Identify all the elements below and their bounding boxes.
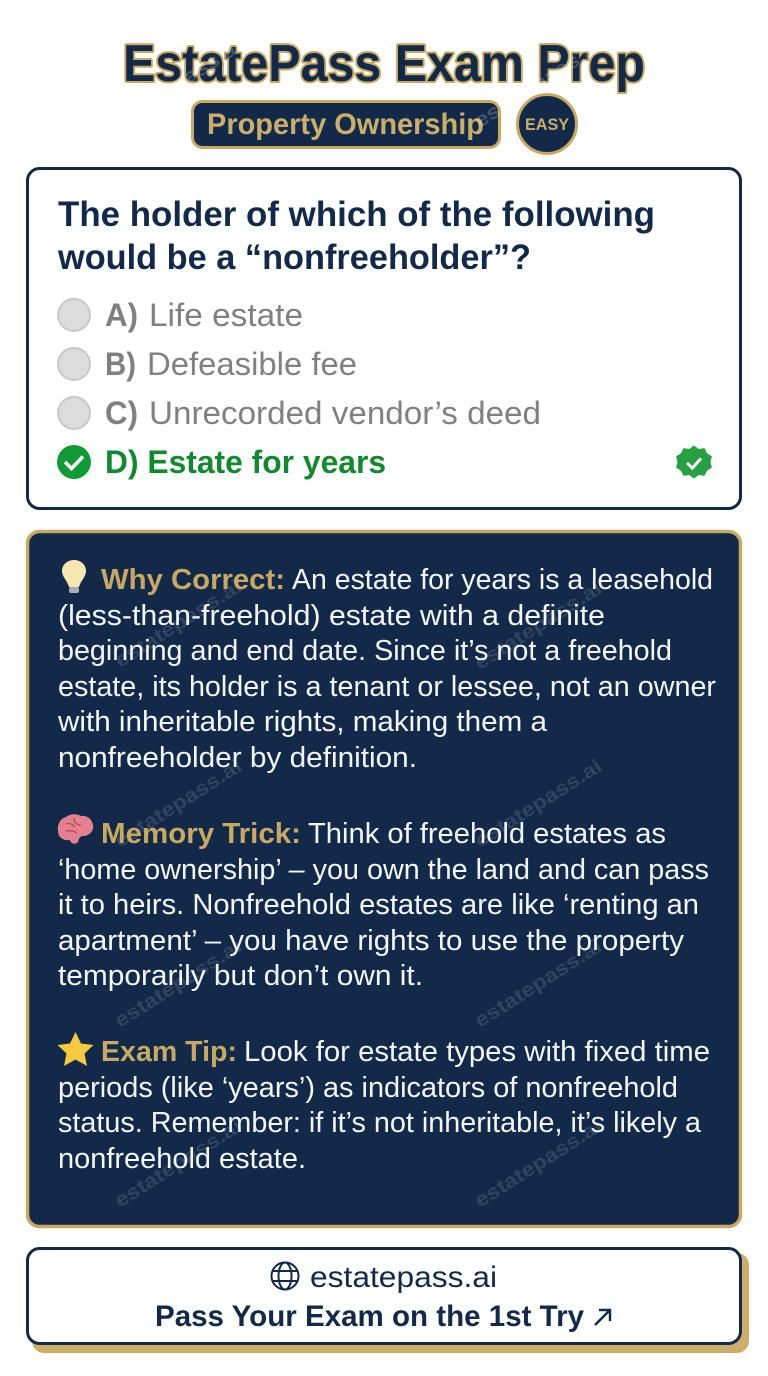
watermarks: estatepass.ai xyxy=(471,1115,606,1212)
section: why correct: nonfreeholder by definition. xyxy=(58,742,417,774)
option C: Unrecorded vendor’s deed xyxy=(149,395,541,431)
arrow xyxy=(595,1310,610,1325)
section: why correct: (less-than-freehold) estate with a definite xyxy=(58,600,605,632)
difficulty badge: EASY xyxy=(525,115,570,134)
watermarks: estatepass.ai xyxy=(111,575,246,672)
category pill: Property Ownership xyxy=(207,108,484,141)
watermarks: estatepass.ai xyxy=(111,1115,246,1212)
watermarks over header: estatepass.ai xyxy=(111,35,246,132)
section: memory trick: it to heirs. Nonfreehold estates are like ‘renting an xyxy=(58,889,699,921)
section: memory trick xyxy=(58,814,709,992)
option A: Life estate xyxy=(149,297,303,333)
panel: explanation xyxy=(28,532,740,1226)
section: why correct: with inheritable rights, making them a xyxy=(57,706,548,738)
option B: B) xyxy=(105,346,136,382)
option B: Defeasible fee xyxy=(147,346,357,382)
section: exam tip: periods (like ‘years’) as indicators of nonfreehold xyxy=(58,1072,678,1104)
icon: star xyxy=(58,1032,94,1066)
watermarks: estatepass.ai xyxy=(471,935,606,1032)
section: memory trick: temporarily but don’t own it. xyxy=(58,960,423,992)
panel: footer call to action xyxy=(28,1248,749,1353)
icon: light bulb xyxy=(62,560,86,593)
icon: brain xyxy=(58,814,93,844)
tagline: Pass Your Exam on the 1st Try xyxy=(155,1300,584,1333)
section: why correct xyxy=(57,560,716,774)
question text xyxy=(57,195,655,277)
section: exam tip: Look for estate types with fixed time xyxy=(244,1036,710,1068)
option A xyxy=(58,297,303,333)
section: why correct: Why Correct: xyxy=(101,564,285,596)
option C: C) xyxy=(105,395,138,431)
category pill xyxy=(192,102,500,148)
option D correct: D) Estate for years xyxy=(105,444,386,480)
watermarks: estatepass.ai xyxy=(111,755,246,852)
watermarks over header: estatepass.ai xyxy=(471,35,606,132)
option A: A) xyxy=(105,297,138,333)
watermarks xyxy=(111,575,606,1212)
section: memory trick: Memory Trick: xyxy=(101,818,301,850)
icon: globe xyxy=(272,1262,298,1290)
section: why correct: An estate for years is a leasehold xyxy=(292,564,713,596)
question text: The holder of which of the following xyxy=(58,195,655,234)
section: why correct: beginning and end date. Since it’s not a freehold xyxy=(58,635,672,667)
section: memory trick: ‘home ownership’ – you own the land and can pass xyxy=(58,854,709,886)
difficulty badge xyxy=(518,94,576,154)
icon: verified badge xyxy=(676,445,712,479)
section: memory trick: apartment’ – you have rights to use the property xyxy=(58,925,684,957)
section: exam tip: nonfreehold estate. xyxy=(58,1143,306,1175)
panel: question xyxy=(28,168,740,508)
watermarks over header xyxy=(111,35,606,132)
watermarks: estatepass.ai xyxy=(471,577,606,674)
section: exam tip: status. Remember: if it’s not inheritable, it’s likely a xyxy=(58,1107,702,1139)
website: estatepass.ai xyxy=(310,1261,497,1294)
option B xyxy=(58,346,357,382)
section: exam tip xyxy=(58,1032,710,1175)
title: EstatePass Exam Prep xyxy=(123,35,645,93)
watermarks: estatepass.ai xyxy=(471,755,606,852)
section: memory trick: Think of freehold estates as xyxy=(308,818,666,850)
section: exam tip: Exam Tip: xyxy=(101,1036,237,1068)
section: why correct: estate, its holder is a tenant or lessee, not an owner xyxy=(58,671,716,703)
watermarks: estatepass.ai xyxy=(111,935,246,1032)
question text: would be a “nonfreeholder”? xyxy=(57,238,531,277)
